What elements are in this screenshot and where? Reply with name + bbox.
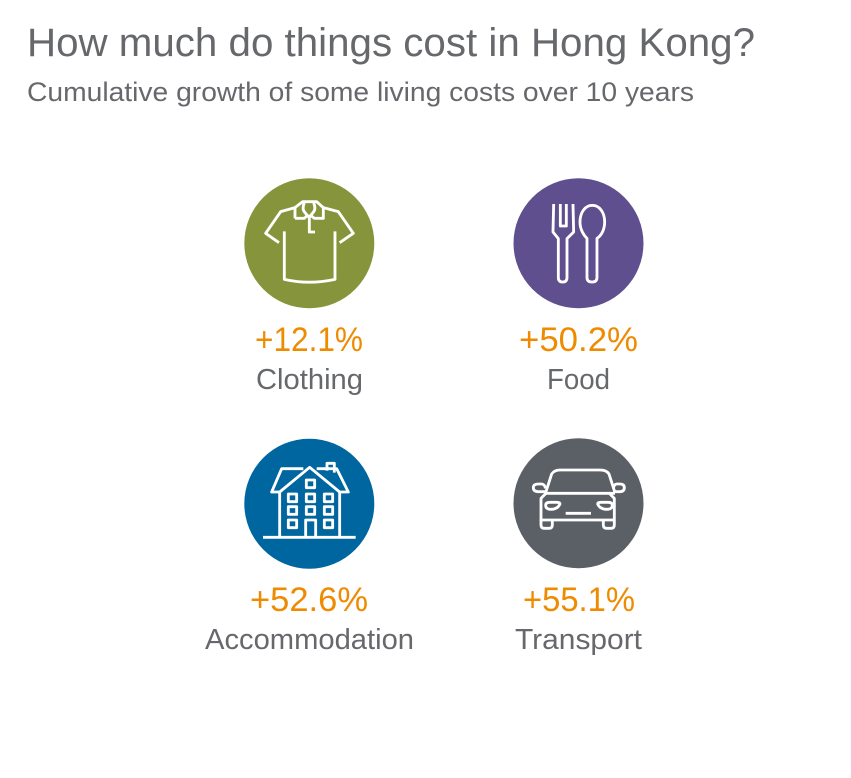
label: accommodation: Accommodation (205, 624, 414, 656)
label: food: Food (547, 364, 610, 396)
value: transport: +55.1% (523, 581, 635, 619)
panel: clothing (244, 178, 374, 396)
panel: accommodation (205, 439, 414, 656)
icon: shirt (244, 178, 374, 308)
subtitle: Cumulative growth of some living costs over 10 years (27, 77, 694, 107)
icon: car (514, 438, 644, 568)
label: transport: Transport (515, 624, 642, 656)
label: clothing: Clothing (256, 364, 363, 396)
panel: food (514, 178, 644, 396)
value: food: +50.2% (519, 321, 638, 359)
icon: fork and spoon (514, 178, 644, 308)
panel: transport (514, 438, 644, 656)
value: clothing: +12.1% (255, 321, 363, 359)
title: How much do things cost in Hong Kong? (27, 21, 755, 65)
value: accommodation: +52.6% (250, 581, 368, 619)
icon: apartment building (244, 439, 374, 569)
